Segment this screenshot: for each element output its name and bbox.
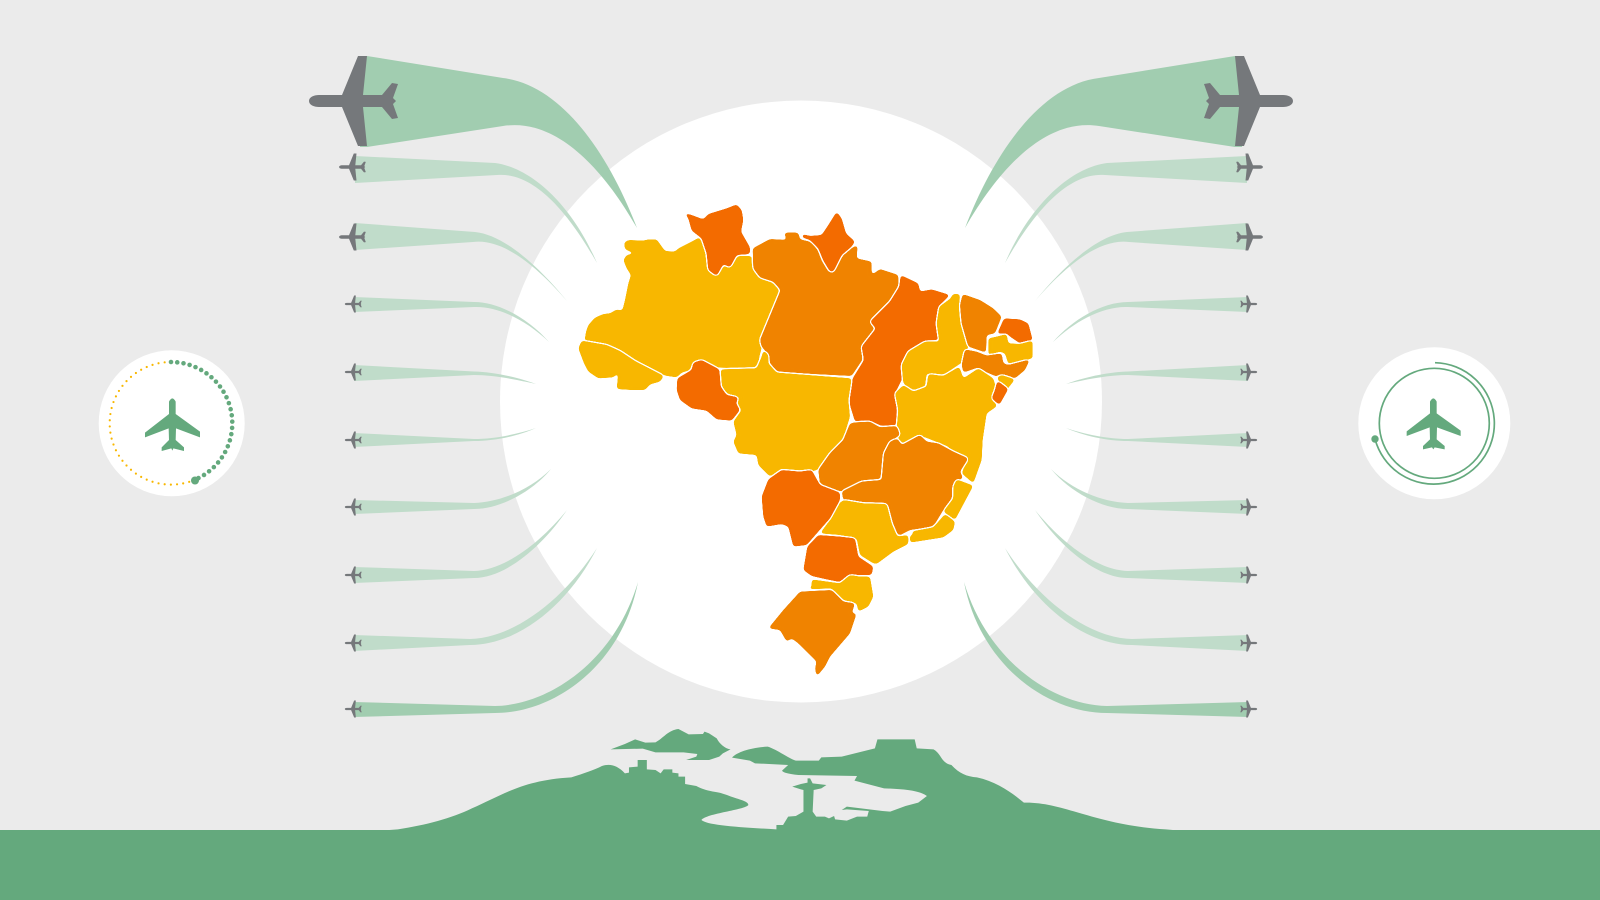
yellow dotted arc [110, 362, 195, 485]
state: Sao Paulo [820, 500, 908, 564]
Rio de Janeiro skyline and ground [0, 729, 1600, 900]
inner ring [1379, 368, 1489, 478]
state: Piaui [902, 294, 968, 392]
end dot [1371, 435, 1379, 443]
state: Roraima [684, 204, 750, 276]
state: Rio Grande do Norte [997, 318, 1033, 343]
state: Ceara [960, 294, 1002, 353]
state: Sergipe [992, 381, 1008, 405]
right badge: solid flight ring [1358, 347, 1510, 499]
state: Mato Grosso do Sul [762, 470, 840, 547]
badge background [99, 350, 245, 496]
state: Para [753, 233, 898, 376]
left flight trails with planes [309, 56, 638, 718]
state: Rio de Janeiro [910, 514, 955, 543]
state: Amazonas [583, 237, 781, 377]
state: Bahia [895, 367, 997, 483]
green dotted arc [171, 362, 232, 480]
badge background [1358, 347, 1510, 499]
state: Rio Grande do Sul [768, 590, 857, 677]
state: Goias [818, 422, 900, 492]
icon: plane [145, 398, 200, 451]
state: Espirito Santo [943, 479, 973, 520]
left badge: dotted flight ring [99, 350, 245, 496]
state: Mato Grosso [721, 350, 852, 477]
ground band [0, 830, 1600, 900]
state: Santa Catarina [807, 575, 873, 612]
state: Minas Gerais [842, 435, 968, 537]
map of Brazil [578, 204, 1033, 677]
icon: plane [1407, 398, 1461, 449]
state: Paraiba [988, 334, 1033, 364]
end dot [191, 476, 199, 484]
state: Rondonia [677, 360, 740, 421]
state: Alagoas [997, 375, 1015, 390]
right flight trails with planes [964, 56, 1293, 718]
white central circle [500, 100, 1102, 702]
Sugarloaf mountain [611, 729, 731, 760]
state: Amapa [802, 212, 855, 272]
state: Maranhao and Tocantins [848, 275, 950, 426]
outer arc [1375, 363, 1494, 484]
state: Parana [803, 535, 873, 582]
state: Pernambuco [962, 349, 1030, 378]
hills, skyline and Christ the Redeemer [380, 739, 1180, 843]
southern states [762, 435, 973, 677]
state: Acre [578, 341, 664, 390]
